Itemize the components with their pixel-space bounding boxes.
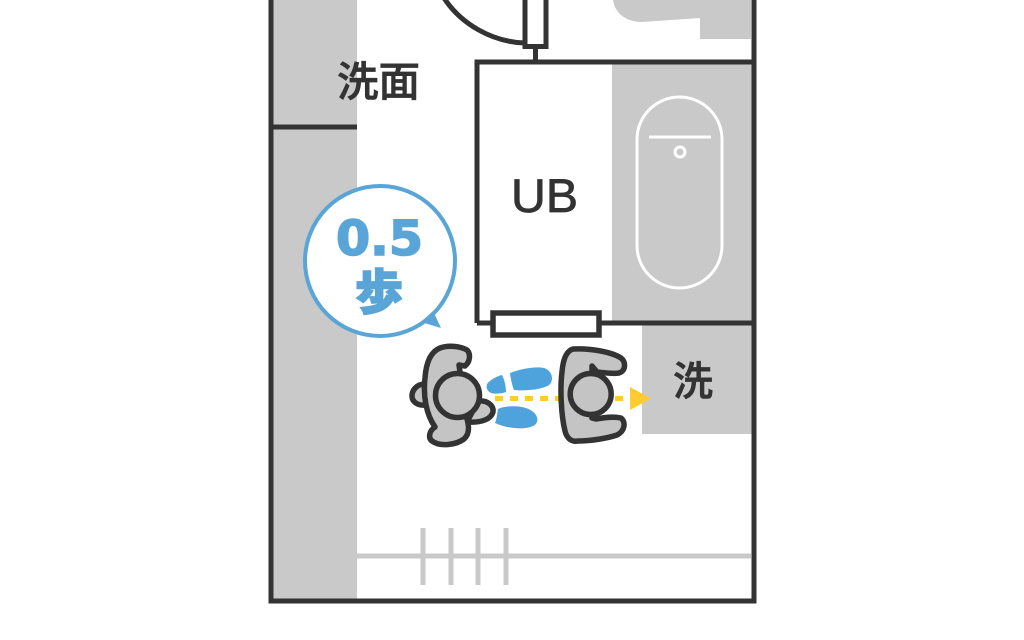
washing machine area: [642, 323, 752, 434]
speech bubble: 0.5 steps: [305, 186, 455, 336]
left counter band: [271, 0, 357, 601]
label: washroom: 洗面: [337, 59, 420, 105]
UB door: [493, 313, 599, 335]
handrail: [357, 528, 751, 585]
label: washing machine: 洗: [673, 360, 713, 404]
person: after step: [561, 349, 625, 441]
bathtub: [637, 97, 722, 288]
walls: [271, 0, 754, 601]
door and swing arc: [444, 0, 546, 62]
value: 0.5: [336, 211, 423, 267]
walking direction arrow: [495, 387, 651, 410]
top fixture (toilet area): [613, 0, 751, 39]
unit: 歩: [355, 267, 403, 320]
footprints: [487, 367, 552, 428]
bath area floor: [612, 62, 752, 322]
label: UB: UB: [511, 169, 578, 222]
person: before step: [412, 346, 493, 445]
